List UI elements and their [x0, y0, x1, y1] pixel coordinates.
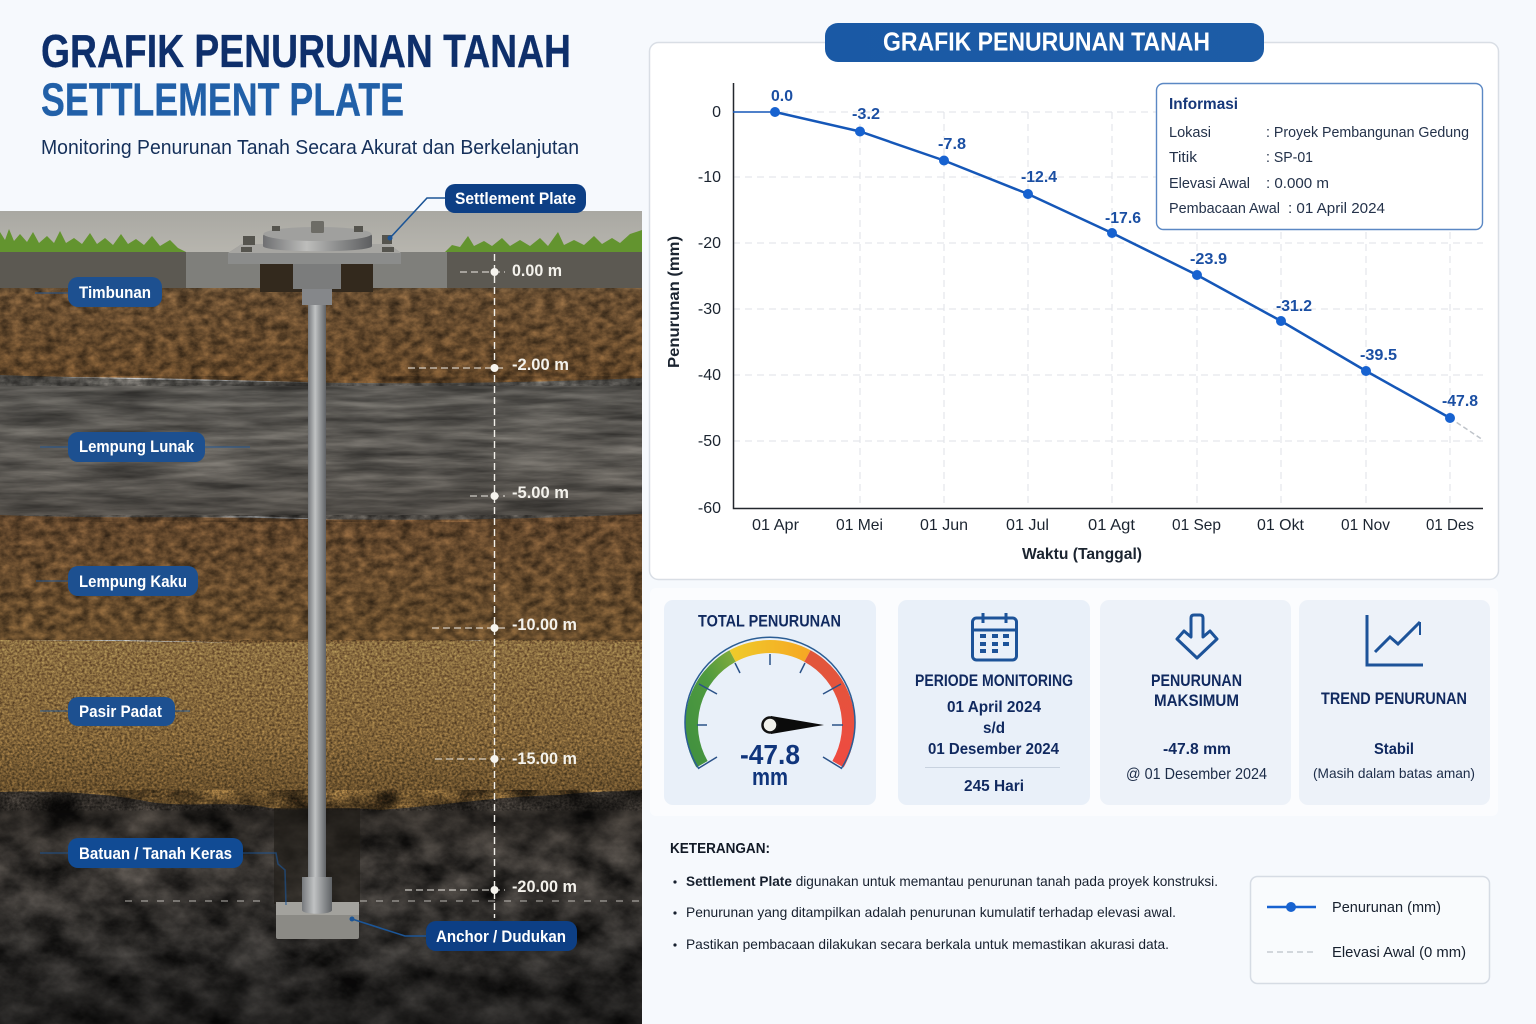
x axis labels: 01 Apr [752, 517, 800, 534]
pad cavity [260, 264, 373, 292]
texture: rock [0, 790, 642, 1024]
note 2: Penurunan yang ditampilkan adalah penurunan kumulatif terhadap elevasi awal. [686, 904, 1176, 920]
grass right [445, 230, 642, 252]
callout: Lempung Lunak [68, 432, 205, 462]
card: penurunan maksimum [1100, 600, 1291, 805]
callout: Lempung Kaku [68, 566, 198, 596]
anchor collar [302, 877, 332, 914]
info box: : 01 April 2024 [1288, 200, 1385, 217]
card: trend penurunan [1299, 600, 1490, 805]
depth label 5: -5.00 m [512, 483, 569, 502]
x axis labels: 01 Sep [1172, 517, 1221, 534]
data labels: -31.2 [1276, 298, 1312, 315]
anchor top face [276, 902, 359, 915]
steel rod [308, 305, 326, 880]
callout: Batuan / Tanah Keras [68, 838, 243, 868]
callout: Lempung Kaku: Lempung Kaku [79, 572, 187, 591]
depth guide ticks [405, 272, 505, 890]
callout: Anchor / Dudukan [426, 921, 577, 951]
legend line: penurunan: Penurunan (mm) [1332, 899, 1441, 916]
card: periode monitoring: PERIODE MONITORING [915, 671, 1073, 690]
data labels: -39.5 [1360, 347, 1397, 364]
leader lines [35, 198, 445, 936]
texture: soft clay [0, 376, 642, 522]
card: periode monitoring: 245 Hari [964, 778, 1024, 795]
panel: soil cross-section illustration [0, 211, 642, 1024]
x axis labels: 01 Agt [1088, 517, 1136, 534]
title block [41, 25, 579, 159]
x axis labels: 01 Jun [920, 517, 968, 534]
depth scale [405, 254, 577, 918]
subtitle: Monitoring Penurunan Tanah Secara Akurat dan Berkelanjutan [41, 137, 579, 159]
soil layer: pasir padat [0, 640, 642, 820]
depth axis [494, 254, 496, 918]
note 3: Pastikan pembacaan dilakukan secara berkala untuk memastikan akurasi data. [686, 936, 1169, 952]
x axis labels: 01 Okt [1257, 517, 1305, 534]
depth label 15: -15.00 m [512, 749, 577, 768]
callout: Pasir Padat: Pasir Padat [79, 702, 162, 721]
icon: calendar [972, 613, 1016, 660]
soil layer: lempung kaku [0, 514, 642, 642]
steel disc top [264, 227, 372, 241]
anchor block [276, 915, 359, 939]
x axis labels: 01 Mei [836, 517, 883, 534]
anchor hole [274, 808, 360, 904]
data labels: -47.8 [1442, 393, 1478, 410]
note bullets [673, 880, 677, 947]
card: periode monitoring: 01 Desember 2024 [928, 741, 1059, 758]
data labels: -23.9 [1190, 251, 1227, 268]
gray fill strip [0, 252, 642, 288]
data labels: -3.2 [852, 106, 880, 123]
card: trend penurunan: Stabil [1374, 741, 1414, 758]
soil layer: lempung lunak [0, 375, 642, 530]
y axis labels [698, 104, 721, 517]
pavement surface [0, 211, 642, 255]
card: periode monitoring: s/d [983, 720, 1005, 737]
info box: : Proyek Pembangunan Gedung [1266, 124, 1469, 141]
info box [1156, 84, 1482, 230]
panel: KPI band [650, 588, 1498, 816]
card: total penurunan [664, 600, 876, 805]
soil layer: timbunan [0, 288, 642, 384]
card: penurunan maksimum: -47.8 mm [1163, 741, 1231, 758]
icon: down arrow [1177, 615, 1217, 658]
info box: Elevasi Awal [1169, 175, 1250, 192]
data labels: -7.8 [938, 136, 966, 153]
info box: Informasi [1169, 96, 1238, 113]
data labels: -17.6 [1105, 210, 1141, 227]
y axis title: Penurunan (mm) [666, 236, 683, 368]
title line 1: GRAFIK PENURUNAN TANAH [41, 25, 571, 77]
y axis labels: -30 [698, 301, 721, 318]
texture: timbunan soil [0, 288, 642, 386]
gauge value: -47.8 [740, 739, 800, 770]
hex nut [293, 264, 341, 289]
y axis labels: -10 [698, 169, 721, 186]
rock ledge dashes [125, 900, 639, 902]
info box: : SP-01 [1266, 149, 1313, 166]
info box: Pembacaan Awal [1169, 200, 1280, 217]
depth label 0: 0.00 m [512, 261, 562, 280]
y axis labels: 0 [712, 104, 721, 121]
x axis labels [752, 517, 1474, 534]
data labels [771, 88, 1478, 410]
y axis labels: -50 [698, 433, 721, 450]
callout: Settlement Plate: Settlement Plate [455, 189, 576, 208]
legend line: elevasi awal: Elevasi Awal (0 mm) [1332, 944, 1466, 961]
x axis title: Waktu (Tanggal) [1022, 546, 1142, 563]
card: trend penurunan: TREND PENURUNAN [1321, 689, 1467, 708]
y axis labels: -60 [698, 500, 721, 517]
corner bolts [241, 226, 394, 252]
icon: trend chart [1367, 615, 1423, 665]
note 1: Settlement Plate digunakan untuk memantau penurunan tanah pada proyek konstruksi. [686, 873, 1218, 889]
info box: Titik [1169, 149, 1198, 166]
grass left [0, 229, 186, 252]
depth markers [490, 268, 498, 894]
x axis labels: 01 Jul [1006, 517, 1049, 534]
card: periode monitoring [898, 600, 1090, 805]
gauge [685, 637, 855, 769]
depth label 10: -10.00 m [512, 615, 577, 634]
legend [1250, 876, 1490, 984]
chart panel frame [650, 42, 1498, 580]
gauge unit: mm [752, 764, 788, 791]
y axis labels: -40 [698, 367, 721, 384]
card: trend penurunan: (Masih dalam batas aman) [1313, 765, 1475, 781]
callout: Settlement Plate [445, 184, 586, 213]
callout: Timbunan [68, 277, 162, 307]
callout: Pasir Padat [68, 697, 175, 726]
base plate [228, 244, 401, 264]
settlement line [733, 107, 1483, 440]
centre bolt [311, 221, 324, 233]
concrete pad [186, 252, 447, 288]
card: penurunan maksimum: PENURUNAN [1151, 671, 1242, 690]
chart title pill [825, 23, 1264, 62]
data labels: 0.0 [771, 88, 793, 105]
title line 2: SETTLEMENT PLATE [41, 74, 404, 126]
y axis labels: -20 [698, 235, 721, 252]
chart title pill: GRAFIK PENURUNAN TANAH [883, 26, 1210, 56]
card: periode monitoring: 01 April 2024 [947, 699, 1041, 716]
data labels: -12.4 [1021, 169, 1057, 186]
callout: Timbunan: Timbunan [79, 283, 151, 302]
callout: Lempung Lunak: Lempung Lunak [79, 437, 194, 456]
card: penurunan maksimum: MAKSIMUM [1154, 691, 1239, 710]
axes [734, 83, 1483, 508]
depth label 20: -20.00 m [512, 877, 577, 896]
x axis labels: 01 Nov [1341, 517, 1390, 534]
texture: sand [0, 640, 642, 810]
keterangan notes [670, 840, 1218, 952]
texture: stiff clay [0, 515, 642, 640]
legend line: penurunan [1267, 899, 1441, 916]
soil layer: batuan [0, 790, 642, 1024]
card: penurunan maksimum: @ 01 Desember 2024 [1126, 766, 1267, 783]
steel disc [263, 234, 372, 252]
base plate top [228, 244, 401, 253]
x axis labels: 01 Des [1426, 517, 1474, 534]
grid [733, 112, 1483, 508]
card: total penurunan: TOTAL PENURUNAN [698, 612, 841, 630]
panel: settlement chart [650, 23, 1498, 580]
lower nut [302, 289, 332, 305]
callout: Anchor / Dudukan: Anchor / Dudukan [436, 927, 566, 946]
gauge needle [771, 716, 824, 734]
info box: Lokasi [1169, 124, 1211, 141]
callout: Batuan / Tanah Keras: Batuan / Tanah Keras [79, 844, 232, 863]
info box: : 0.000 m [1266, 175, 1329, 192]
notes heading: KETERANGAN: [670, 840, 770, 857]
depth label 2: -2.00 m [512, 355, 569, 374]
